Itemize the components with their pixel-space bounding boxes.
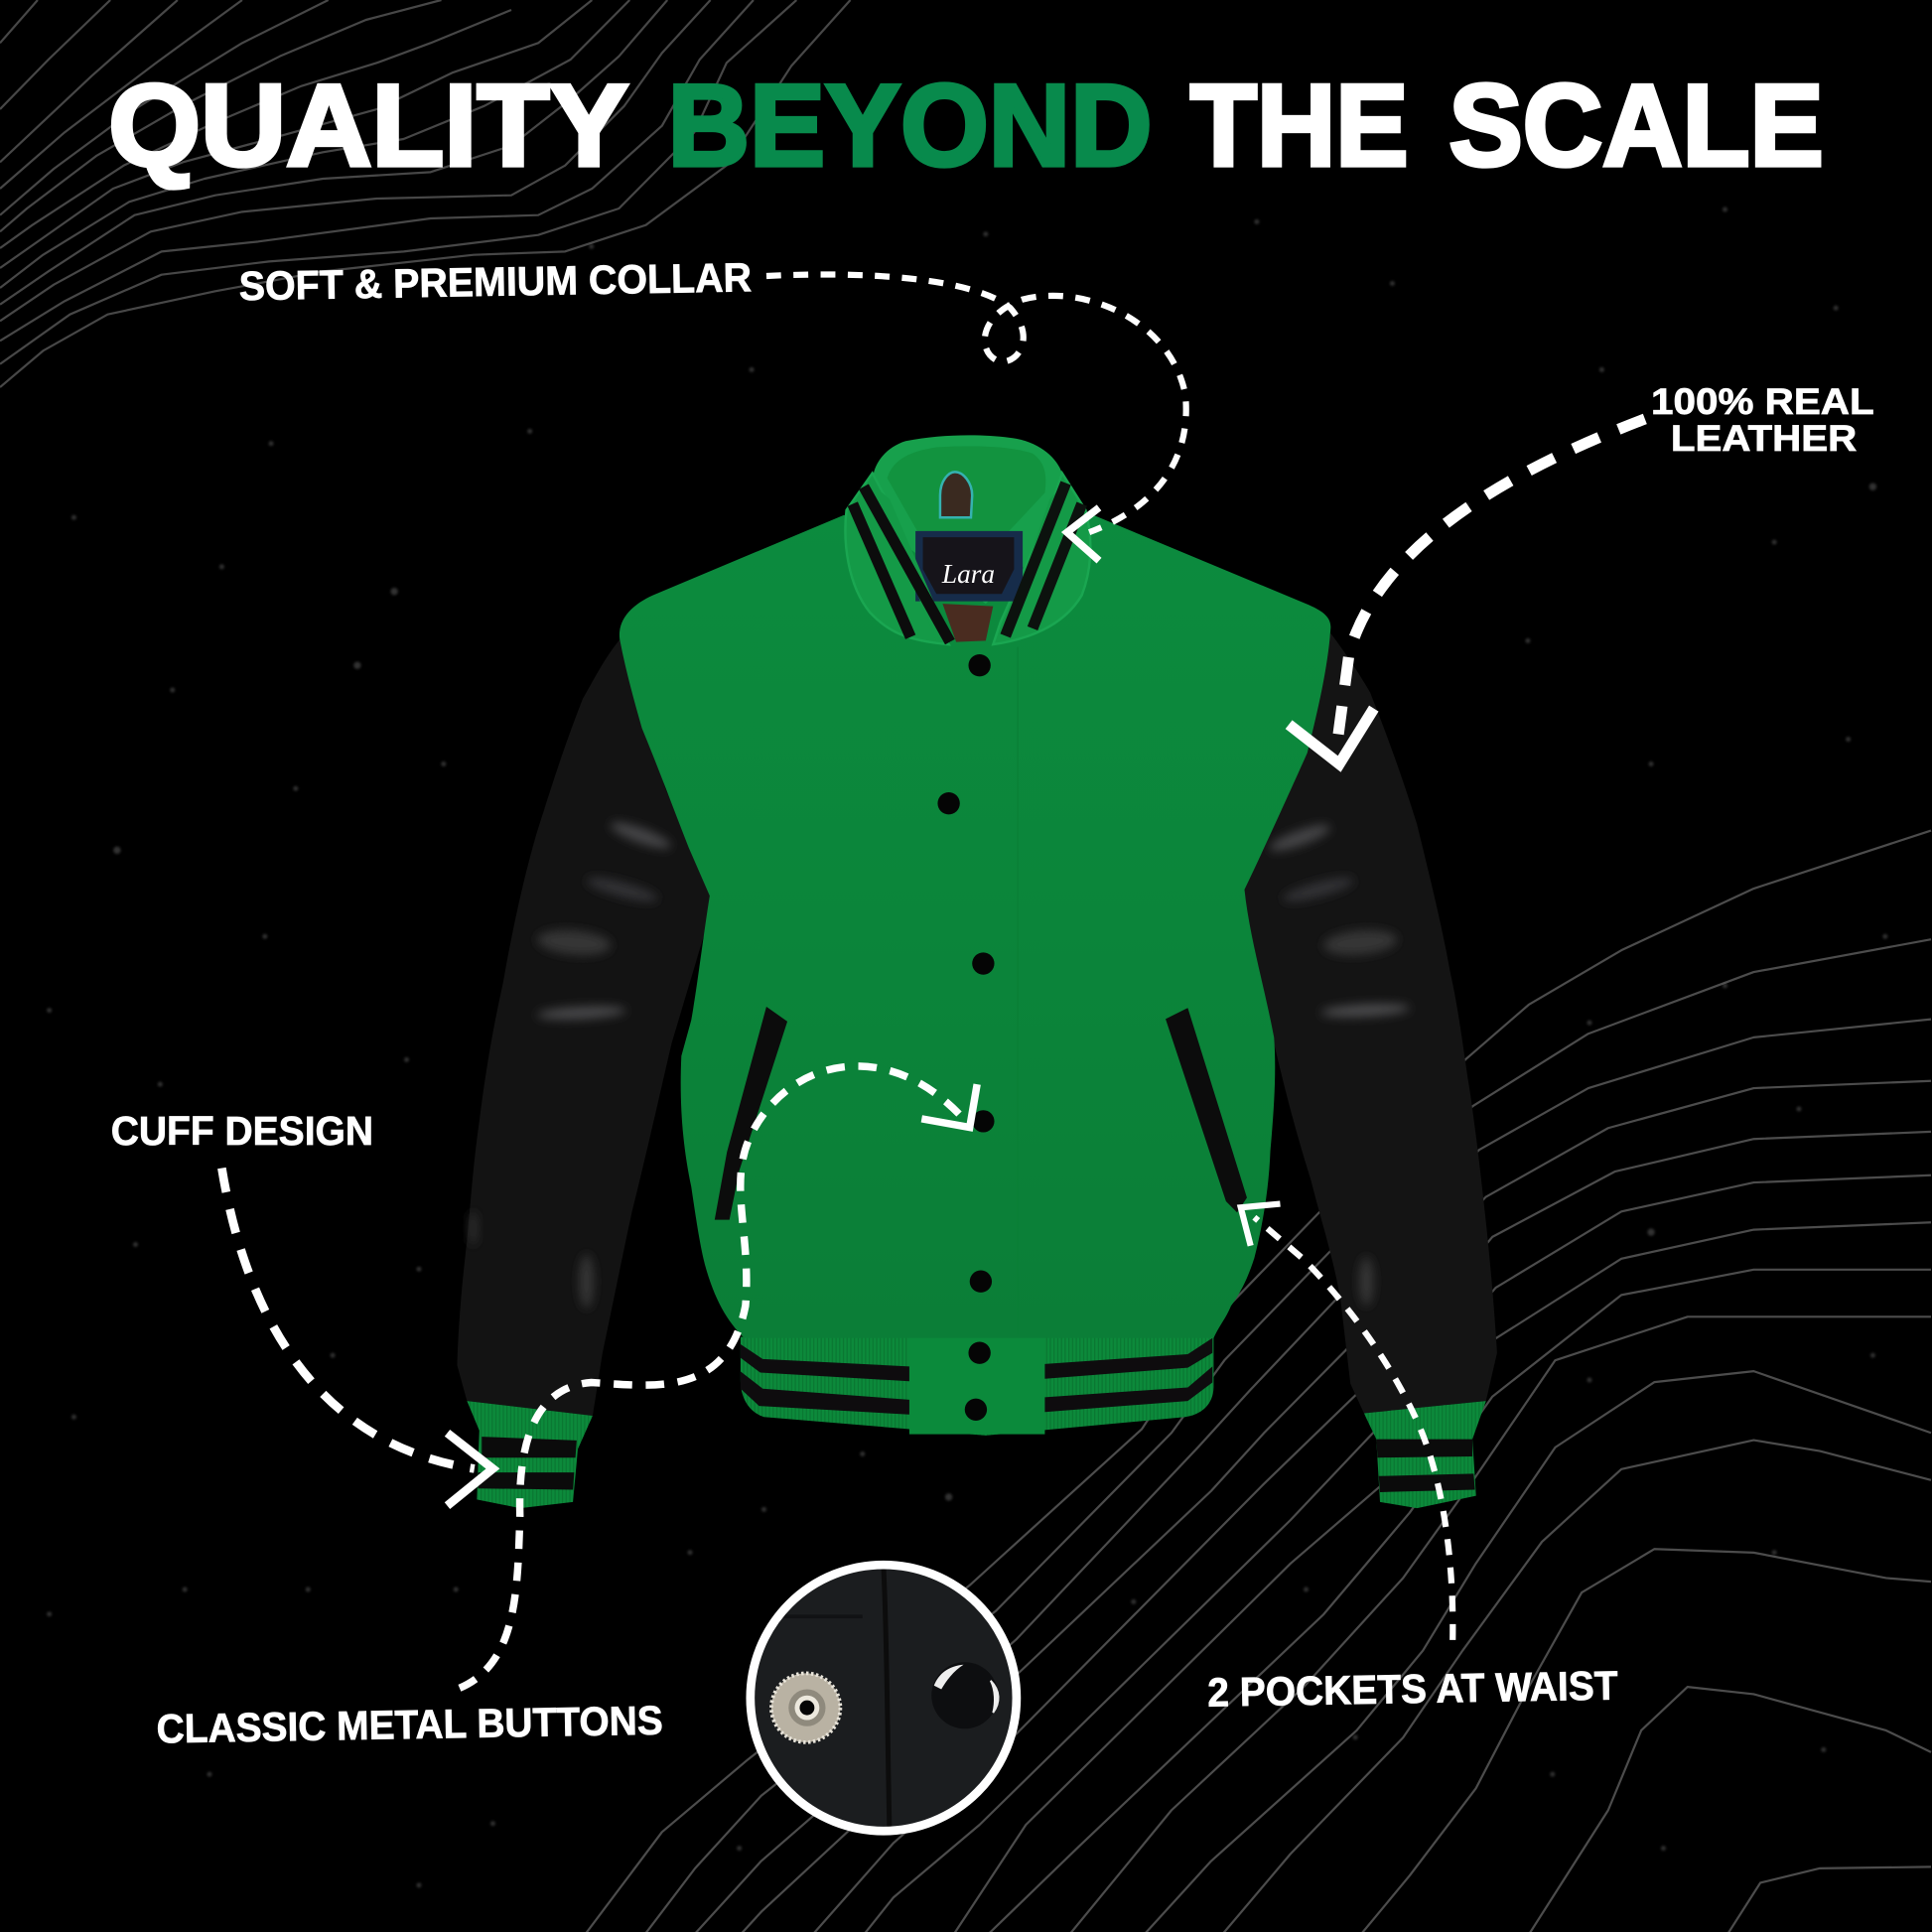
arrow: collar xyxy=(766,274,1186,561)
arrow: metal buttons xyxy=(460,1066,977,1688)
green wool body xyxy=(620,511,1330,1338)
arrow: real leather xyxy=(1289,419,1645,763)
title: QUALITY xyxy=(108,60,628,190)
arrow: cuff xyxy=(221,1169,492,1506)
label: classic metal buttons: CLASSIC METAL BUTTONS xyxy=(156,1698,663,1752)
left pocket xyxy=(715,1007,787,1220)
left cuff xyxy=(467,1401,593,1508)
title: SCALE xyxy=(1449,60,1824,190)
snap buttons xyxy=(937,654,995,1421)
title xyxy=(108,60,1824,190)
size tag xyxy=(940,472,972,517)
varsity jacket xyxy=(457,435,1497,1508)
button detail circle xyxy=(746,1561,1021,1836)
label: 100% real leather xyxy=(1651,380,1874,459)
right leather sleeve xyxy=(1242,633,1497,1414)
contour lines bottom right xyxy=(569,831,1931,1932)
lara logo: Lara xyxy=(941,559,995,589)
collar back xyxy=(857,435,1082,604)
title: BEYOND xyxy=(668,60,1152,190)
label: soft and premium collar: SOFT & PREMIUM COLLAR xyxy=(238,254,752,309)
left leather sleeve xyxy=(457,639,715,1416)
metal rivet xyxy=(771,1673,840,1742)
label: 2 pockets at waist: 2 POCKETS AT WAIST xyxy=(1207,1663,1618,1716)
collar xyxy=(845,435,1090,644)
lining xyxy=(942,604,993,642)
black snap xyxy=(931,1662,999,1728)
front placket xyxy=(1017,647,1019,1334)
label: cuff design: CUFF DESIGN xyxy=(111,1108,373,1154)
contour lines top left xyxy=(0,0,851,387)
neck label xyxy=(915,531,1023,602)
label: 100% real leather: 100% REAL xyxy=(1651,380,1874,422)
collar placket edges xyxy=(875,483,1066,642)
right cuff xyxy=(1364,1401,1486,1508)
label: 100% real leather: LEATHER xyxy=(1671,417,1857,459)
title: THE xyxy=(1190,60,1409,190)
waistband xyxy=(741,1337,1213,1436)
right pocket xyxy=(1166,1008,1247,1212)
collar ribbed band xyxy=(845,474,949,644)
arrow: pockets xyxy=(1241,1204,1452,1640)
collar stripes xyxy=(864,486,950,642)
